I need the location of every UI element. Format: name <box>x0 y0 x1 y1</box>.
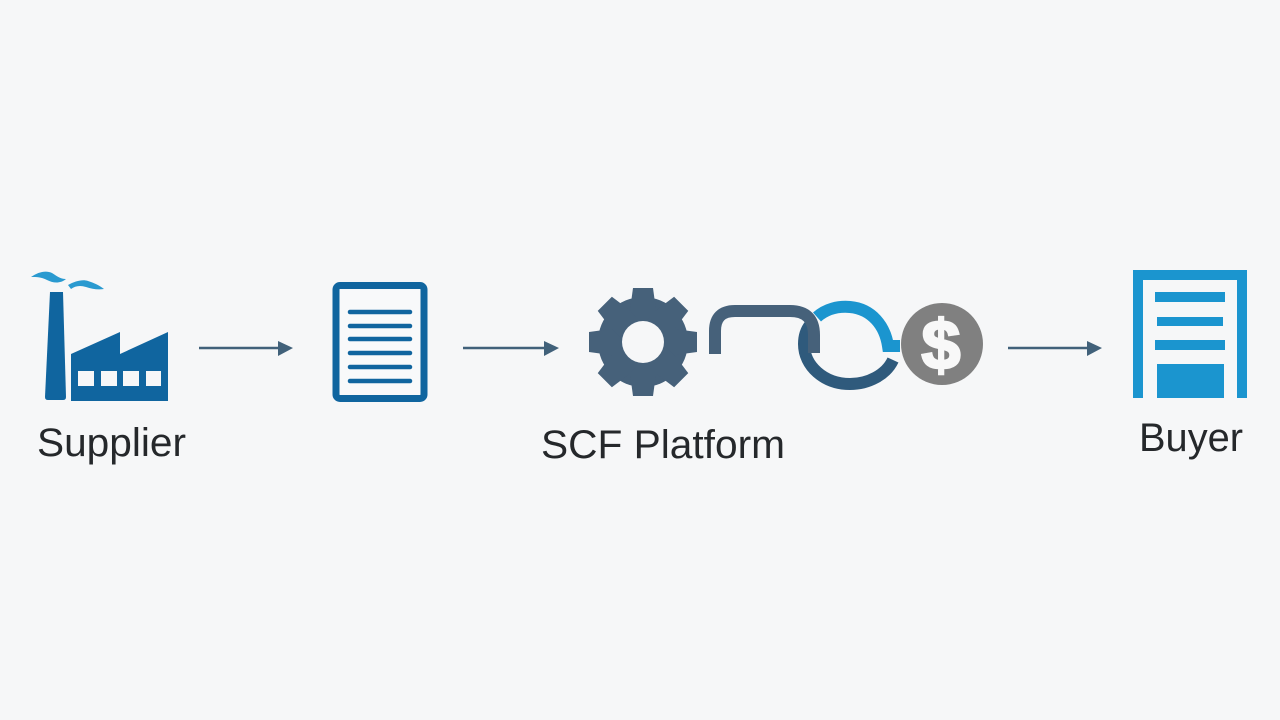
icon: supplier factory <box>31 272 168 401</box>
label: Buyer: Buyer <box>1139 416 1243 460</box>
arrow: supplier to document <box>199 341 293 356</box>
arrow: platform to buyer <box>1008 341 1102 356</box>
label: SCF Platform: SCF Platform <box>541 423 785 467</box>
label: Supplier: Supplier <box>37 421 186 465</box>
icon: chain link <box>715 307 900 384</box>
icon: invoice document <box>336 286 424 398</box>
arrow: document to platform <box>463 341 559 356</box>
icon: buyer building <box>1133 270 1247 398</box>
icon: dollar coin: $ <box>922 306 960 384</box>
icon: gear <box>589 288 697 396</box>
icon: dollar coin <box>901 303 983 385</box>
